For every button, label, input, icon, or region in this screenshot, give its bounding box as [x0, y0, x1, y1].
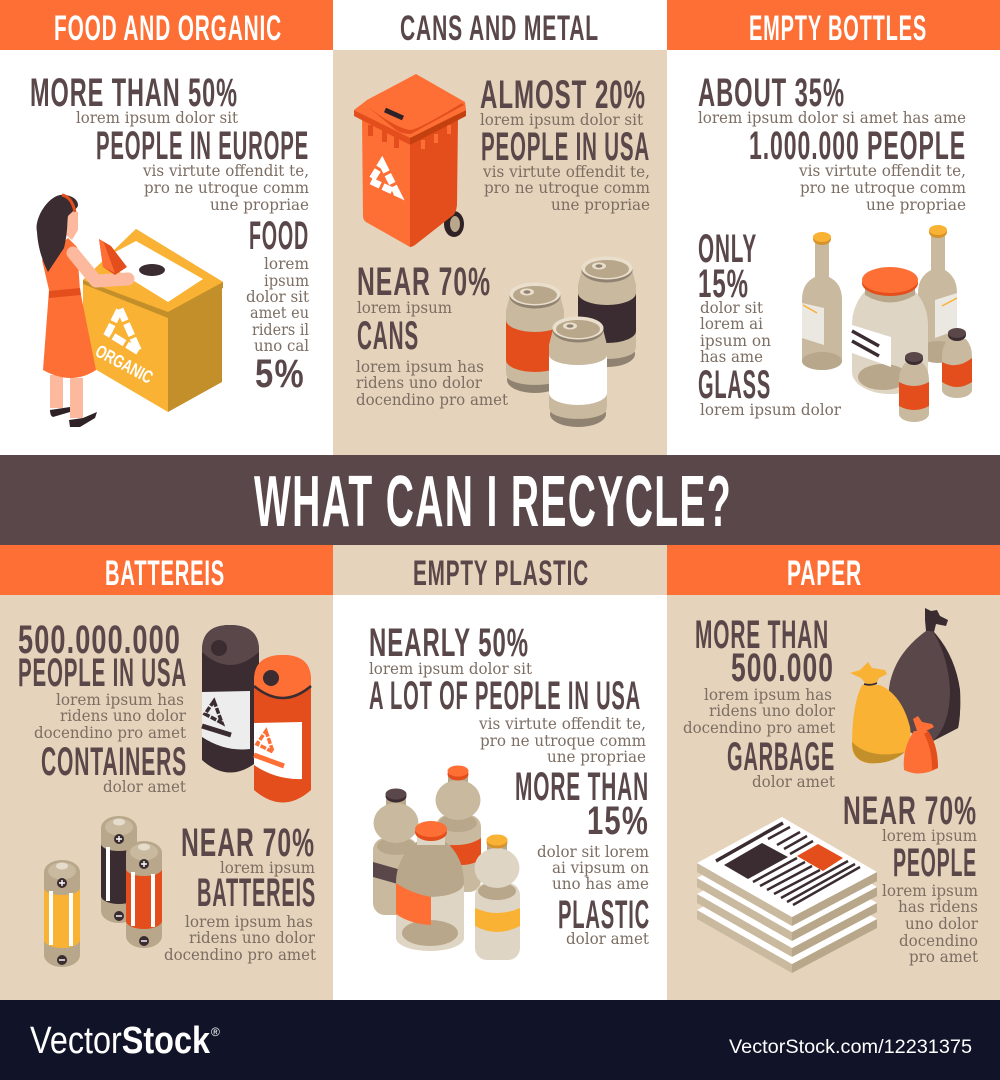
- text block: more than 50 percent: une propriae: [210, 195, 309, 214]
- header: empty bottles: [667, 0, 1000, 50]
- illustration: black battery: [101, 816, 137, 923]
- text block: about 35 percent: pro ne utroque comm: [800, 178, 966, 197]
- illustration: orange label can: [506, 282, 564, 393]
- illustration: large jar: [852, 267, 928, 394]
- text block: almost 20 percent: [480, 73, 650, 214]
- header: food and organic: FOOD AND ORGANIC: [54, 9, 282, 48]
- illustration: plastic bottle with orange band: [436, 766, 481, 892]
- illustration: black label can: [578, 256, 636, 367]
- header: cans and metal: [333, 0, 667, 50]
- text block: more than 500.000 garbage: dolor amet: [752, 772, 836, 791]
- text block: more than 15 percent plastic: dolor amet: [566, 929, 650, 948]
- text block: near 70 percent cans: ridens uno dolor: [356, 373, 482, 392]
- illustration: plastic bottle with yellow band: [474, 834, 520, 960]
- text block: more than 500.000 garbage: [683, 613, 836, 791]
- panel: batteries: [0, 545, 333, 1000]
- text block: more than 500.000 garbage: ridens uno dolor: [709, 701, 835, 720]
- text block: only 15 percent glass: 15%: [698, 262, 749, 306]
- header: food and organic: [0, 0, 333, 50]
- text block: almost 20 percent: une propriae: [551, 195, 650, 214]
- text block: food: riders il: [252, 320, 309, 339]
- text block: more than 500.000 garbage: docendino pro amet: [683, 718, 836, 737]
- text block: 500.000.000 containers: ridens uno dolor: [60, 706, 186, 725]
- text block: near 70 percent cans: [356, 260, 509, 409]
- text block: food: ipsum: [264, 271, 309, 290]
- text block: food: 5%: [255, 352, 305, 396]
- text block: only 15 percent glass: dolor sit: [700, 298, 764, 317]
- text block: almost 20 percent: ALMOST 20%: [480, 73, 646, 117]
- text block: almost 20 percent: lorem ipsum dolor sit: [480, 110, 644, 129]
- text block: more than 15 percent plastic: MORE THAN: [515, 765, 649, 809]
- text block: nearly 50 percent: vis virtute offendit te,: [478, 714, 646, 733]
- text block: near 70 percent people: uno dolor: [905, 914, 978, 933]
- text block: 500.000.000 containers: 500.000.000: [18, 618, 181, 662]
- text block: near 70 percent battereis: [164, 821, 317, 964]
- text block: about 35 percent: [698, 71, 966, 214]
- text block: more than 500.000 garbage: MORE THAN: [695, 613, 829, 657]
- header: cans and metal: CANS AND METAL: [400, 9, 599, 48]
- illustration: small orange garbage bag: [904, 716, 938, 774]
- text block: near 70 percent cans: lorem ipsum: [357, 298, 452, 317]
- illustration: large plastic jug: [396, 821, 464, 951]
- illustration: organic bin: ORGANIC: [92, 341, 156, 388]
- text block: almost 20 percent: PEOPLE IN USA: [481, 125, 650, 169]
- illustration: dark garbage bag: [889, 608, 960, 741]
- text block: only 15 percent glass: ONLY: [698, 227, 757, 271]
- illustration: yellow garbage bag: [850, 662, 910, 763]
- panel: food and organic: FOOD: [249, 214, 309, 258]
- footer bar: [0, 1000, 1000, 1080]
- text block: more than 15 percent plastic: ai vipsum on: [552, 858, 649, 877]
- illustration: newspaper stack: [697, 817, 877, 973]
- header: empty plastic: EMPTY PLASTIC: [413, 554, 589, 593]
- text block: near 70 percent battereis: docendino pro amet: [164, 945, 317, 964]
- illustration: dark battery container: [202, 625, 259, 772]
- text block: near 70 percent cans: lorem ipsum has: [356, 357, 484, 376]
- text block: almost 20 percent: vis virtute offendit te,: [482, 162, 650, 181]
- panel: empty bottles: [667, 0, 1000, 455]
- text block: nearly 50 percent: pro ne utroque comm: [480, 731, 646, 750]
- text block: more than 50 percent: PEOPLE IN EUROPE: [96, 124, 309, 168]
- text block: nearly 50 percent: lorem ipsum dolor sit: [369, 659, 533, 678]
- header: battereis: [0, 545, 333, 595]
- text block: food: uno cal: [254, 336, 309, 355]
- text block: more than 15 percent plastic: [515, 765, 650, 948]
- text block: only 15 percent glass: ipsum on: [700, 331, 771, 350]
- text block: 500.000.000 containers: [18, 618, 187, 796]
- text block: near 70 percent people: lorem ipsum: [882, 826, 977, 845]
- text block: more than 15 percent plastic: dolor sit lorem: [537, 842, 649, 861]
- text block: nearly 50 percent: une propriae: [547, 747, 646, 766]
- text block: near 70 percent battereis: lorem ipsum has: [185, 912, 313, 931]
- text block: 500.000.000 containers: dolor amet: [103, 777, 187, 796]
- illustration: small bottle back: [942, 328, 972, 398]
- illustration: tall bottle right: [918, 225, 958, 363]
- text block: about 35 percent: ABOUT 35%: [698, 71, 845, 115]
- text block: more than 15 percent plastic: PLASTIC: [558, 893, 650, 937]
- text block: only 15 percent glass: GLASS: [698, 363, 771, 407]
- panel: paper: [667, 545, 1000, 1000]
- footer image id: VectorStock.com/12231375: [729, 1037, 972, 1058]
- text block: food: amet eu: [250, 303, 309, 322]
- text block: 500.000.000 containers: CONTAINERS: [41, 740, 187, 784]
- text block: food: dolor sit: [246, 287, 310, 306]
- text block: only 15 percent glass: has ame: [700, 347, 763, 366]
- text block: near 70 percent battereis: BATTEREIS: [197, 871, 316, 915]
- text block: more than 500.000 garbage: GARBAGE: [727, 735, 835, 779]
- illustration: orange battery: [126, 841, 162, 948]
- header: paper: [667, 545, 1000, 595]
- text block: near 70 percent people: pro amet: [909, 947, 979, 966]
- text block: near 70 percent people: docendino: [899, 931, 978, 950]
- text block: near 70 percent cans: docendino pro amet: [356, 390, 509, 409]
- text block: about 35 percent: lorem ipsum dolor si amet has ame: [698, 108, 966, 127]
- footer logo: VectorStock: [30, 1020, 211, 1062]
- text block: about 35 percent: une propriae: [866, 195, 966, 214]
- illustration: small bottle front: [899, 352, 929, 422]
- text block: more than 50 percent: lorem ipsum dolor sit: [76, 108, 239, 127]
- illustration: orange battery container: [254, 655, 311, 802]
- text block: more than 15 percent plastic: uno has ame: [552, 874, 649, 893]
- text block: near 70 percent people: [843, 789, 979, 966]
- header: empty plastic: [333, 545, 667, 595]
- panel: cans and metal: [333, 0, 667, 455]
- header: paper: PAPER: [787, 554, 862, 593]
- text block: only 15 percent glass: lorem ai: [700, 314, 763, 333]
- text block: more than 50 percent: vis virtute offendit te,: [142, 161, 309, 180]
- text block: almost 20 percent: pro ne utroque comm: [484, 178, 650, 197]
- illustration: white label can: [549, 316, 607, 427]
- text block: more than 50 percent: pro ne utroque comm: [144, 178, 309, 197]
- illustration: tall bottle left: [802, 232, 842, 370]
- text block: 500.000.000 containers: docendino pro amet: [34, 723, 187, 742]
- text block: more than 50 percent: [30, 71, 309, 214]
- text block: near 70 percent cans: NEAR 70%: [357, 260, 491, 304]
- illustration: organic bin: [83, 229, 223, 412]
- text block: food: lorem: [264, 254, 309, 273]
- illustration: woman with bag: [37, 195, 128, 427]
- panel: food and organic: [0, 0, 333, 455]
- illustration: plastic bottle with dark label: [373, 788, 418, 915]
- text block: 500.000.000 containers: PEOPLE IN USA: [18, 651, 187, 695]
- title band: [0, 455, 1000, 545]
- text block: near 70 percent people: lorem ipsum: [882, 881, 978, 900]
- text block: near 70 percent battereis: ridens uno dolor: [189, 928, 315, 947]
- registered mark: ®: [211, 1025, 220, 1039]
- text block: more than 500.000 garbage: 500.000: [731, 646, 834, 690]
- panel: empty plastic: [333, 545, 667, 1000]
- text block: near 70 percent people: has ridens: [898, 897, 978, 916]
- text block: only 15 percent glass: [698, 227, 841, 419]
- header: battereis: BATTEREIS: [105, 554, 225, 593]
- text block: near 70 percent battereis: NEAR 70%: [181, 821, 315, 865]
- text block: near 70 percent battereis: lorem ipsum: [220, 858, 315, 877]
- text block: more than 15 percent plastic: 15%: [587, 799, 649, 843]
- illustration: orange wheelie bin: [354, 74, 466, 247]
- text block: more than 50 percent: MORE THAN 50%: [30, 71, 238, 115]
- text block: 500.000.000 containers: lorem ipsum has: [56, 690, 184, 709]
- text block: near 70 percent cans: CANS: [357, 314, 419, 358]
- text block: nearly 50 percent: A LOT OF PEOPLE IN USA: [369, 674, 641, 718]
- text block: food: [246, 214, 310, 396]
- text block: only 15 percent glass: lorem ipsum dolor: [700, 400, 841, 419]
- text block: nearly 50 percent: NEARLY 50%: [369, 621, 529, 665]
- text block: more than 500.000 garbage: lorem ipsum has: [704, 685, 832, 704]
- text block: about 35 percent: vis virtute offendit te,: [798, 161, 966, 180]
- illustration: yellow battery: [44, 860, 80, 967]
- text block: nearly 50 percent: [369, 621, 646, 766]
